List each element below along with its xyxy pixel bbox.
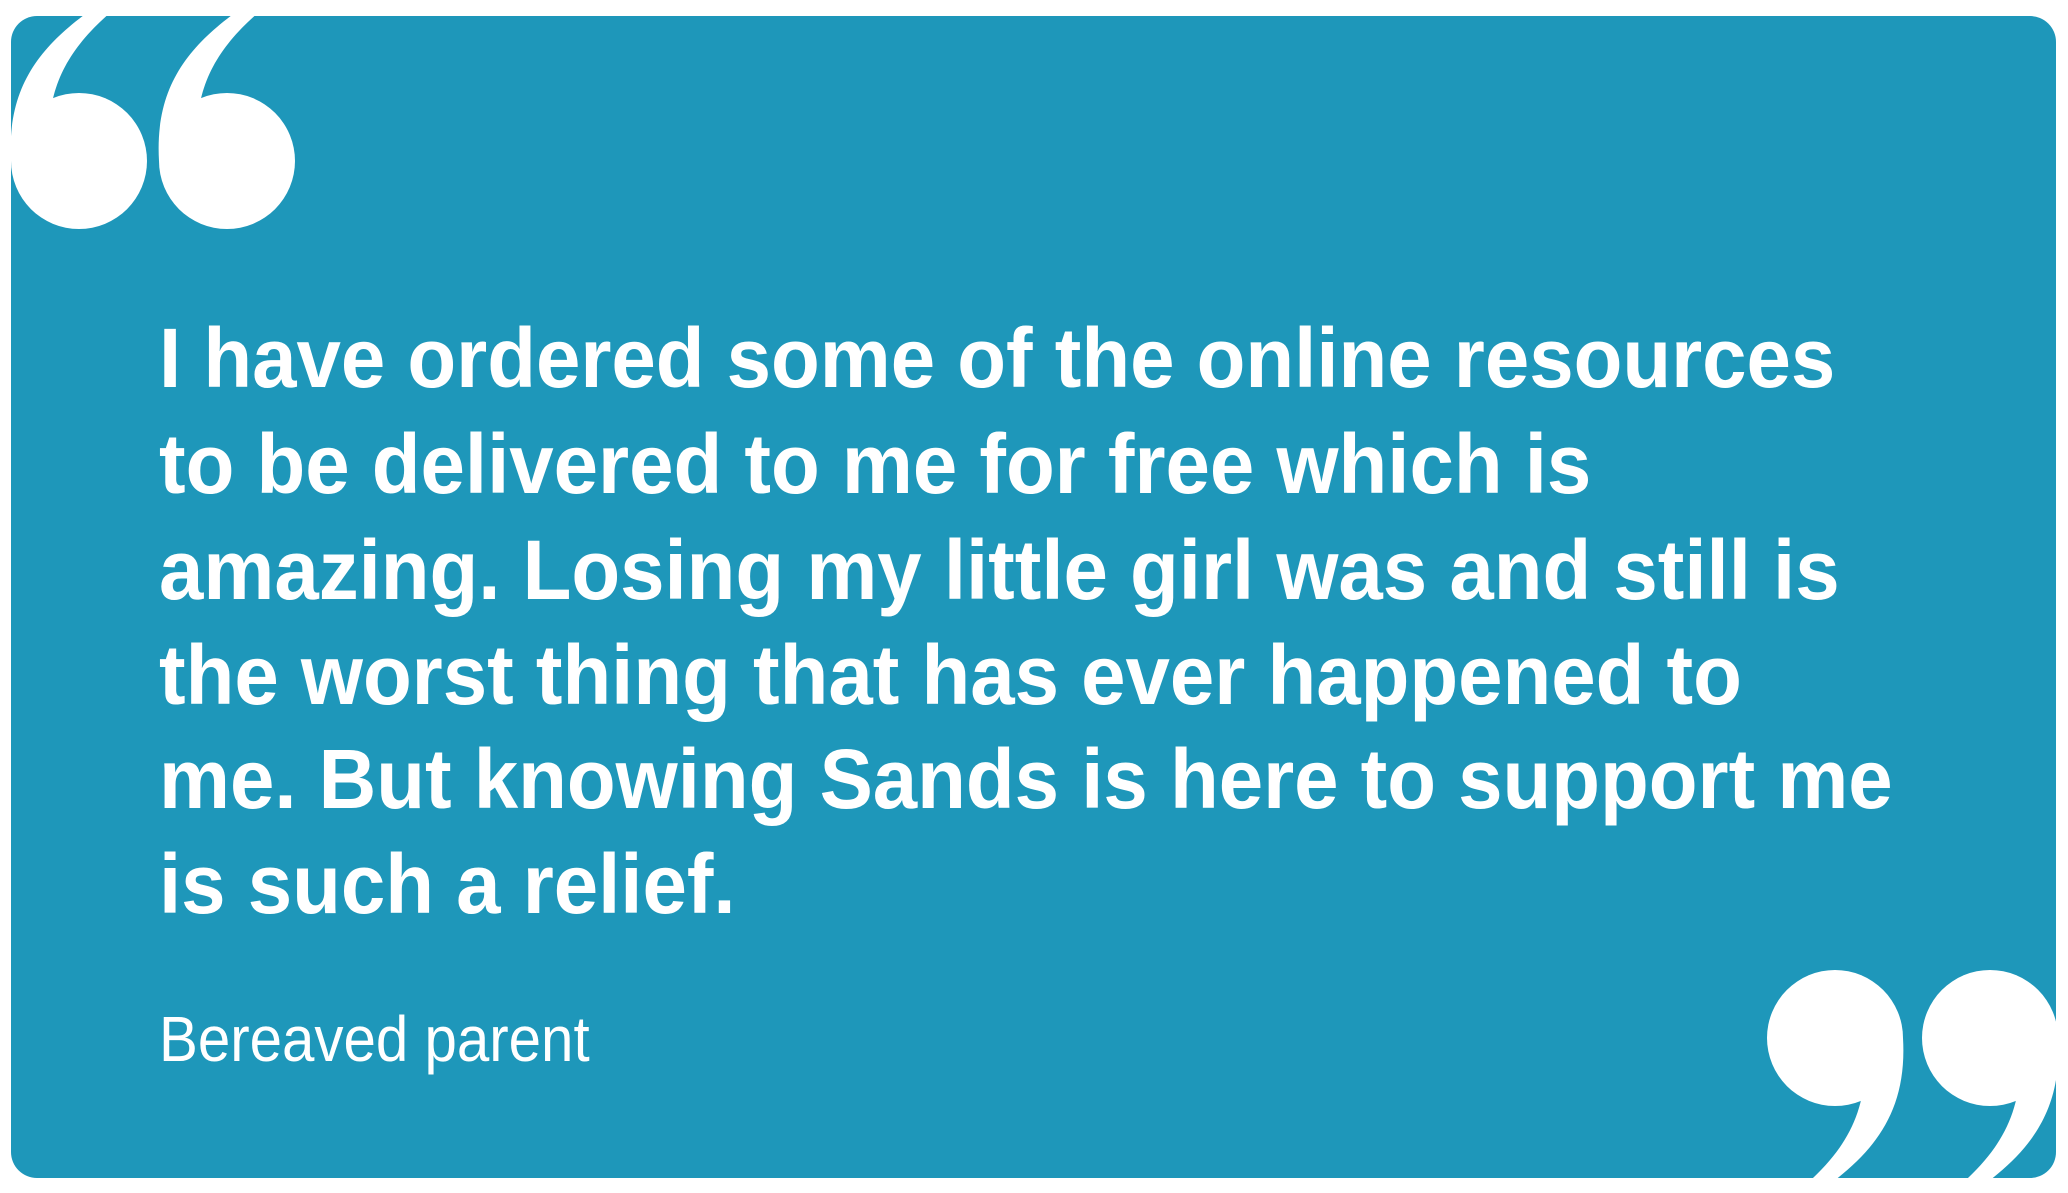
quote panel: amazing. Losing my little girl was and still is [159, 523, 1840, 617]
attribution: Bereaved parent [159, 1003, 590, 1075]
quote text [159, 311, 1893, 931]
quote panel: the worst thing that has ever happened to [159, 628, 1742, 722]
quote panel: is such a relief. [159, 837, 736, 931]
quote panel: me. But knowing Sands is here to support me [159, 732, 1893, 826]
quote panel: to be delivered to me for free which is [159, 417, 1591, 511]
quote panel: I have ordered some of the online resources [159, 311, 1835, 405]
